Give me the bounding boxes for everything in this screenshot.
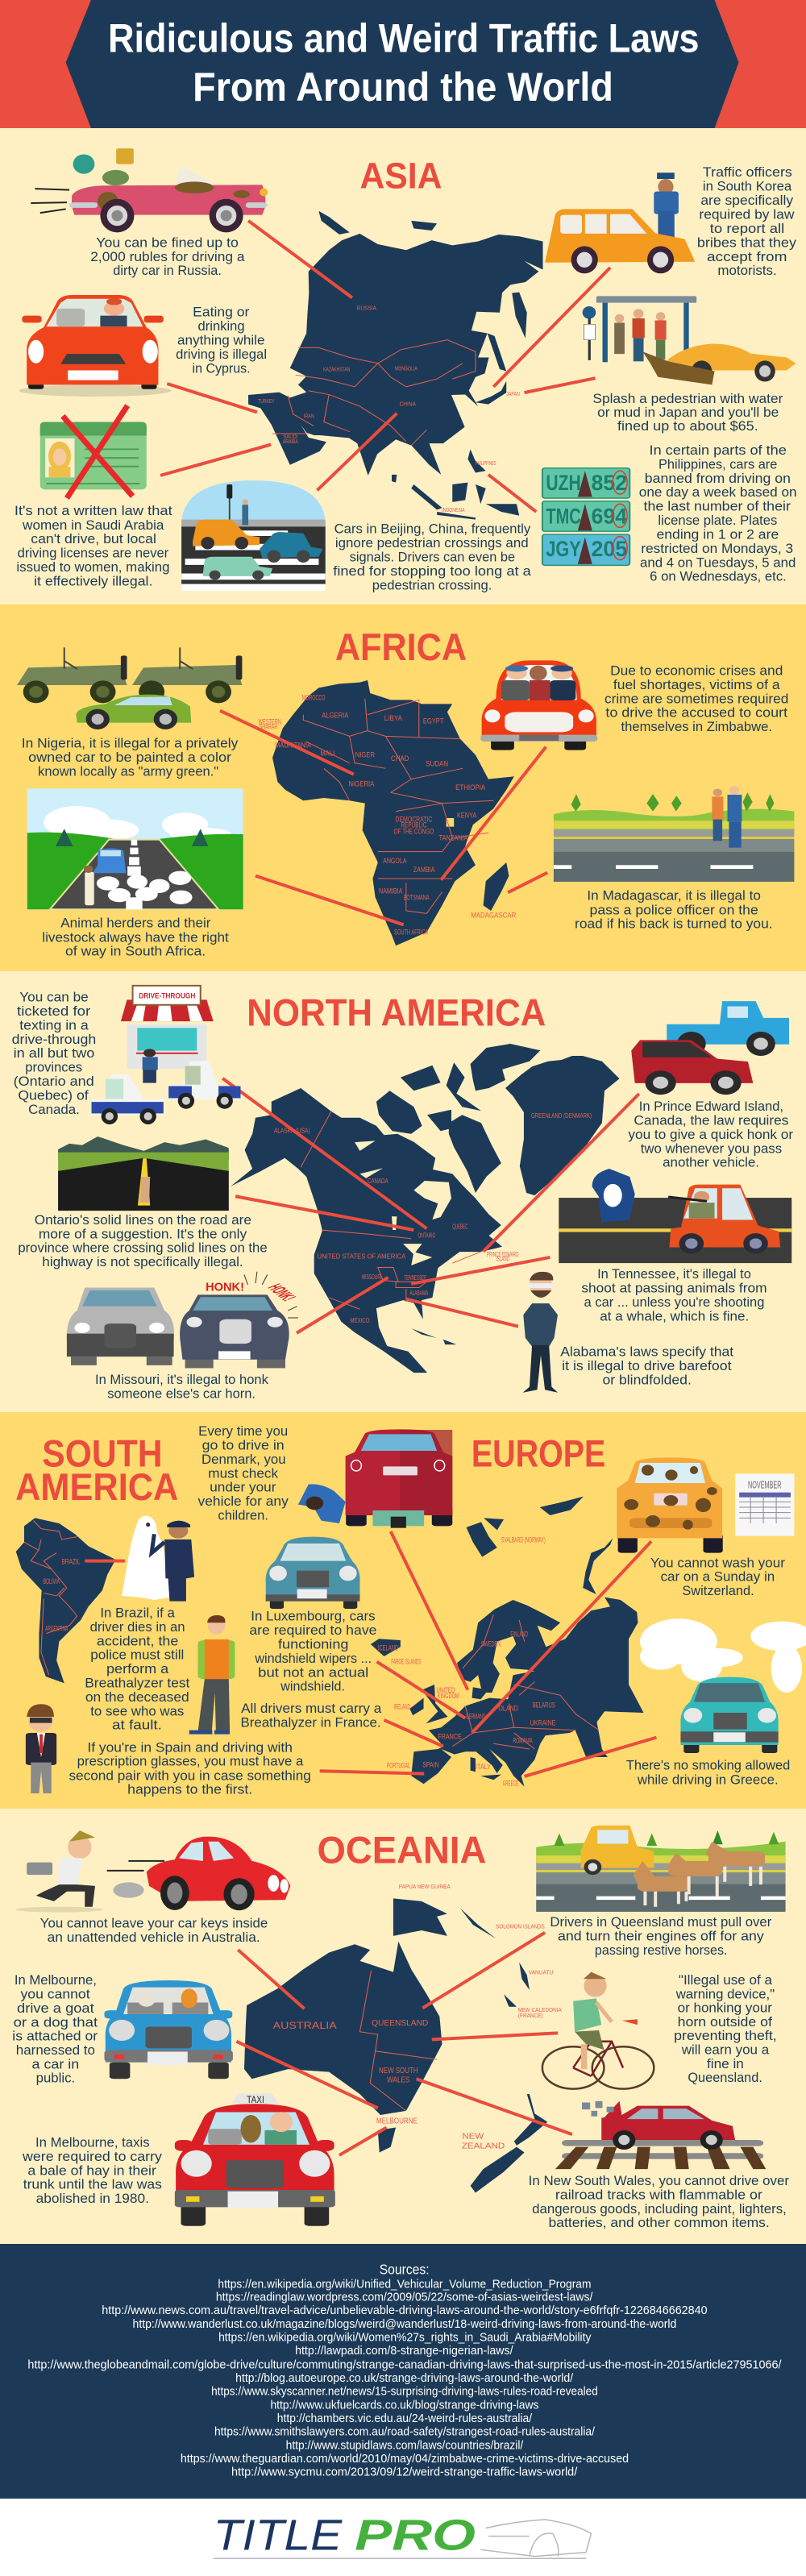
map: Europe: UKRAINE (530, 1719, 555, 1727)
map labels: MONGOLIA (395, 365, 418, 372)
text: Brazil: police must still (90, 1647, 184, 1663)
map: Europe (371, 1497, 644, 1788)
map labels: NIGERIA (348, 779, 375, 788)
map: Oceania (244, 1884, 562, 2192)
map labels: BOLIVIA (44, 1577, 60, 1586)
map labels: NAMIBIA (379, 887, 403, 895)
text: Australia keys: an unattended vehicle in Australia. (48, 1930, 260, 1945)
text: Beijing: Cars in Beijing, China, frequently (334, 522, 531, 537)
logo: Title Pro: PRO (355, 2511, 476, 2559)
text: Cyprus: Eating or (193, 305, 250, 320)
text: Nigeria: known locally as "army green." (38, 764, 218, 779)
text: Denmark (198, 1424, 289, 1523)
map labels: PRINCE EDWARD (487, 1251, 519, 1258)
map labels: ALASKA (USA) (274, 1127, 310, 1135)
text: Madagascar (575, 888, 773, 932)
text: Melbourne goat: or a dog that (14, 2015, 98, 2030)
heading: ASIA: ASIA (359, 156, 442, 197)
text: Canada texting: You can be (19, 990, 89, 1005)
text: Melbourne goat: drive a goat (17, 2001, 94, 2016)
text: Alabama: or blindfolded. (603, 1373, 692, 1388)
text: South Korea: accept from (707, 250, 787, 264)
icon: bus stop and splashing car (583, 296, 796, 384)
text: Canada texting: in all but two (14, 1046, 94, 1061)
map labels: FAROE ISLANDS (391, 1657, 421, 1666)
map labels: (FRANCE) (518, 2013, 543, 2019)
text: Russia: dirty car in Russia. (113, 264, 222, 279)
text: France: All drivers must carry a (241, 1701, 382, 1716)
text: Japan: fined up to about $65. (617, 419, 758, 434)
icon: license plates: TMC (546, 504, 581, 528)
text: Luxembourg: windshield wipers ... (255, 1652, 372, 1666)
map labels: CHAD (391, 754, 409, 763)
text: Ontario: highway is not specifically illegal. (42, 1255, 243, 1269)
icon: honking cars (67, 1272, 300, 1368)
map labels: FINLAND (510, 1630, 528, 1639)
icon: drive-through shop and trucks: DRIVE-THROUGH (139, 991, 195, 1000)
text: Beijing: signals. Drivers can even be (350, 551, 515, 565)
map labels: SOLOMON ISLANDS (496, 1924, 545, 1930)
text: Saudi Arabia: can't drive, but local (31, 533, 156, 546)
text: sources list: http://chambers.vic.edu.au/24-weird-rules-australia/ (277, 2412, 533, 2424)
text: Canada texting (12, 990, 96, 1117)
text: Melbourne taxi (22, 2136, 162, 2206)
icon: whale and hunter in car (559, 1169, 791, 1263)
text: Tennessee (581, 1267, 767, 1324)
heading: NORTH AMERICA: NORTH AMERICA (247, 991, 546, 1034)
text: Greece (626, 1758, 790, 1787)
icon: red taxi (175, 2093, 335, 2226)
panel: Oceania (0, 1809, 806, 2244)
text: Queensland horn (674, 1973, 777, 2085)
map labels: SUDAN (426, 760, 448, 768)
map labels: ANGOLA (383, 857, 407, 866)
text: Brazil (85, 1606, 189, 1733)
text: France: Breathalyzer in France. (240, 1715, 381, 1730)
map labels (44, 1558, 81, 1633)
icon: license plates: UZH (546, 470, 581, 495)
icon: Beijing crossing scene (181, 480, 326, 591)
map: South America: ARGENTINA (45, 1624, 68, 1633)
icon: honking cars: HONK! (206, 1281, 244, 1294)
text: Melbourne goat: you cannot (21, 1987, 90, 2001)
text: Philippines (639, 443, 797, 584)
text: Denmark: vehicle for any (198, 1494, 289, 1509)
map labels: NEW SOUTH (379, 2066, 418, 2075)
logo: Title Pro (214, 2511, 591, 2559)
text: Cyprus: driving is illegal (176, 347, 267, 362)
heading: SOUTH AMERICA: SOUTH (42, 1432, 163, 1475)
text: Brazil: at fault. (112, 1718, 162, 1733)
text: Zimbabwe (604, 663, 788, 734)
icon: red car rear with children and man (298, 1429, 452, 1528)
text: Ontario: more of a suggestion. It's the only (39, 1227, 247, 1242)
text: Australia keys: You cannot leave your car keys inside (40, 1916, 268, 1931)
map labels: UNITED (436, 1686, 455, 1695)
text: Russia: 2,000 rubles for driving a (90, 250, 245, 264)
text: Brazil: In Brazil, if a (100, 1606, 175, 1621)
map labels: KAZAKHSTAN (323, 366, 350, 372)
text: Spain: If you're in Spain and driving with (87, 1740, 293, 1755)
text: Brazil: accident, the (97, 1634, 178, 1648)
map labels (378, 1535, 555, 1788)
map labels: SPAIN (422, 1760, 439, 1769)
map labels: REPUBLIC (401, 821, 426, 829)
map labels: PORTUGAL (387, 1761, 410, 1770)
text: Brazil: driver dies in an (90, 1620, 185, 1635)
text: Melbourne taxi: In Melbourne, taxis (35, 2136, 150, 2150)
icon: army green jeeps and car (17, 647, 242, 729)
text: Brazil: perform a (106, 1662, 169, 1676)
map labels: CANADA (368, 1177, 388, 1185)
icon: running man and red car (15, 1830, 290, 1913)
map labels: WALES (387, 2075, 409, 2084)
map labels: PHILIPPINES (476, 459, 496, 467)
map: South America (16, 1518, 116, 1683)
map labels: DEMOCRATIC (395, 815, 432, 824)
map labels: AUSTRALIA (273, 2020, 337, 2031)
text: Denmark: must check (208, 1466, 278, 1481)
map labels: WESTERN (259, 717, 281, 726)
map labels: ALABAMA (409, 1289, 429, 1297)
text: South Africa: Animal herders and their (60, 916, 211, 931)
text: Canada texting: texting in a (19, 1018, 89, 1033)
text: sources list (27, 2262, 782, 2478)
text: Brazil: Breathalyzer test (85, 1676, 189, 1691)
text: South Korea (697, 165, 796, 279)
map labels: GERMANY (466, 1712, 485, 1721)
text: Melbourne goat: a car in (32, 2057, 79, 2072)
text: Spain (69, 1740, 311, 1797)
text: Melbourne goat: In Melbourne, (15, 1973, 97, 1988)
map labels: TANZANIA (439, 834, 468, 842)
map: South America: BRAZIL (62, 1558, 81, 1566)
logo: Title Pro: TITLE (214, 2511, 343, 2559)
icon: drive-through shop and trucks (92, 986, 240, 1124)
text: Saudi Arabia: It's not a written law that (15, 504, 172, 518)
panel: South America and Europe (0, 1412, 806, 1809)
icon: red car front view (19, 295, 171, 397)
text: Alabama (560, 1344, 733, 1388)
text: Missouri (95, 1373, 269, 1402)
text: Ontario (18, 1212, 268, 1269)
heading: SOUTH AMERICA (15, 1432, 178, 1508)
map labels: PAPUA NEW GUINEA (399, 1884, 451, 1890)
text: Cyprus: drinking (198, 319, 245, 334)
leader lines (160, 221, 610, 512)
text: Luxembourg: but not an actual (258, 1665, 368, 1680)
icon: man in suit with glasses (26, 1704, 56, 1793)
text: Russia (90, 236, 245, 279)
text: Spain: prescription glasses, you must have a (77, 1754, 304, 1769)
icon: license plates: 852 (591, 470, 627, 495)
icon: solid line road (58, 1136, 229, 1211)
icon: blue truck and red SUV (631, 1001, 789, 1095)
map labels: INDONESIA (442, 506, 465, 513)
map labels: ROMANIA (513, 1737, 533, 1745)
map labels: ZAMBIA (413, 866, 435, 875)
map labels: MAURITANIA (275, 741, 311, 750)
map labels: POLAND (495, 1705, 518, 1713)
text: Russia: You can be fined up to (96, 236, 239, 251)
map labels: MISSOURI (362, 1273, 381, 1281)
map labels: SWEDEN (481, 1640, 501, 1648)
map labels: JAPAN (506, 390, 520, 397)
map labels: ZEALAND (462, 2142, 505, 2150)
icon: license plates: JGY (546, 536, 581, 561)
text: sources list: Sources: (380, 2262, 430, 2278)
text: Australia keys (40, 1916, 268, 1945)
text: Luxembourg: functioning (278, 1637, 348, 1652)
map labels: MEXICO (350, 1316, 370, 1324)
text: Prince Edward Island (628, 1099, 793, 1170)
panel: North America (0, 971, 806, 1412)
map labels: MALI (320, 749, 334, 758)
panel: Africa: AFRICA (335, 626, 467, 668)
text: Japan (592, 393, 783, 434)
text: sources list: http://www.stupidlaws.com/laws/countries/brazil/ (286, 2438, 524, 2452)
text: Spain: second pair with you in case something (69, 1768, 311, 1783)
map labels: TENNESSEE (404, 1273, 426, 1282)
map labels: ALGERIA (322, 712, 349, 720)
text: Cyprus: anything while (177, 334, 264, 348)
map labels: NEW (462, 2132, 484, 2141)
text: South Korea: motorists. (717, 264, 777, 279)
icon: blue car with goat and dog (104, 1980, 233, 2079)
panel: Africa: MADAGASCAR (471, 911, 516, 920)
map labels: LIBYA (384, 714, 402, 723)
text: Luxembourg: windshield. (280, 1679, 345, 1694)
text: South Africa: livestock always have the right (42, 930, 229, 945)
map labels (258, 305, 520, 513)
text: Missouri: someone else's car horn. (107, 1386, 256, 1402)
map labels: ISLAND (496, 1255, 509, 1263)
map labels (274, 1111, 592, 1324)
map labels: SOUTH AFRICA (394, 928, 428, 937)
panel: title banner (0, 0, 806, 128)
text: South Africa: of way in South Africa. (65, 944, 206, 959)
panel: sources (0, 2244, 806, 2559)
map labels: ONTARIO (418, 1232, 435, 1239)
text: Denmark: Every time you (198, 1424, 288, 1439)
text: Saudi Arabia (15, 504, 172, 589)
text: New South Wales (529, 2174, 789, 2230)
map labels: VANUATU (529, 1969, 553, 1976)
text: Queensland horses (550, 1915, 771, 1958)
map labels: OF THE CONGO (394, 827, 434, 836)
map labels: QUEBEC (452, 1223, 467, 1231)
map labels: GREECE (503, 1779, 518, 1788)
panel: Africa (0, 605, 806, 971)
map labels: BOTSWANA (404, 894, 430, 902)
text: Cyprus (176, 305, 267, 376)
text: Missouri: In Missouri, it's illegal to honk (95, 1373, 269, 1387)
icon: red taxi: TAXI (247, 2094, 264, 2105)
text: Melbourne taxi: trunk until the law was (23, 2178, 162, 2192)
text: Melbourne goat (12, 1973, 98, 2086)
map labels (273, 1884, 562, 2150)
text: Luxembourg: In Luxembourg, cars (251, 1609, 376, 1624)
icon: muddy orange car rear (617, 1457, 723, 1553)
text: Denmark: under your (210, 1480, 276, 1495)
text: Brazil: on the deceased (85, 1690, 189, 1705)
panel: Oceania: NEW CALEDONIA (518, 2007, 562, 2013)
heading: OCEANIA: OCEANIA (318, 1828, 486, 1871)
text: Canada texting: Canada. (28, 1102, 80, 1117)
text: Canada texting: ticketed for (17, 1003, 90, 1019)
icon: teal car Luxembourg (266, 1537, 360, 1609)
text: Cyprus: in Cyprus. (193, 362, 251, 376)
map labels: ICELAND (378, 1644, 398, 1652)
icon: crossed out driving license (40, 405, 147, 498)
map labels: IRAN (304, 413, 314, 419)
map: North America: GREENLAND (DENMARK) (531, 1111, 592, 1120)
title (108, 16, 699, 110)
text: Melbourne goat: harnessed to (16, 2043, 95, 2058)
leader lines (85, 1531, 656, 1776)
map labels: SHARAH (259, 723, 277, 731)
text: Luxembourg (249, 1609, 377, 1694)
text: Beijing: ignore pedestrian crossings and (335, 536, 529, 551)
text: Spain: happens to the first. (127, 1782, 252, 1797)
text: Switzerland (650, 1556, 785, 1598)
text: Melbourne taxi: a bale of hay in their (27, 2163, 156, 2178)
text: Denmark: Denmark, you (202, 1452, 286, 1467)
icon: officer and orange car (545, 172, 695, 273)
text: Melbourne goat: public. (36, 2071, 75, 2086)
map: Asia (248, 211, 543, 520)
map: Europe: SVALBARD (NORWAY) (501, 1535, 546, 1544)
text: Beijing: fined for stopping too long at a (333, 564, 531, 579)
text: Canada texting: (Ontario and (14, 1074, 94, 1089)
map labels: TURKEY (258, 397, 275, 405)
map labels: IRELAND (394, 1703, 410, 1711)
map labels: RUSSIA (357, 305, 377, 311)
text: sources list: http://www.ukfuelcards.co.uk/blog/strange-driving-laws (270, 2398, 538, 2412)
leader lines (236, 1933, 572, 2155)
icon: November calendar (735, 1473, 794, 1536)
text: Saudi Arabia: issued to women, making (16, 560, 169, 575)
text: South Korea: to report all (710, 222, 784, 236)
text: Canada texting: provinces (25, 1060, 82, 1075)
map labels: ITALY (476, 1763, 491, 1772)
text: Queensland horn: fine in (707, 2057, 744, 2071)
text: Denmark: children. (218, 1508, 268, 1523)
icon: Zimbabwe red car (480, 660, 597, 750)
panel: Asia (0, 128, 806, 605)
text: sources list: http://lawpadi.com/8-strange-nigerian-laws/ (295, 2344, 513, 2357)
map labels: MELBOURNE (376, 2117, 418, 2125)
map labels: ETHIOPIA (455, 783, 485, 792)
map: Africa (259, 680, 516, 945)
map labels: EGYPT (423, 717, 444, 725)
icon: man in orange vest (189, 1615, 235, 1735)
icon: horses road scene (536, 1826, 786, 1912)
map labels: QUEENSLAND (372, 2018, 428, 2028)
leader lines (222, 1078, 639, 1333)
icon: cyclist (542, 1972, 654, 2089)
text: Melbourne taxi: abolished in 1980. (36, 2192, 149, 2206)
text: Canada texting: Quebec) of (18, 1088, 89, 1103)
map labels (259, 694, 516, 937)
panel: South America and Europe: EUROPE (472, 1432, 605, 1475)
text: Nigeria (22, 736, 238, 779)
icon: herders on the road scene (27, 788, 243, 909)
icon: blindfolded man (523, 1272, 558, 1393)
map labels: CHINA (400, 401, 417, 407)
icon: smoking teal car (640, 1618, 806, 1753)
icon: license plates (542, 468, 629, 565)
map labels: ARABIA (283, 438, 298, 445)
panel: South America and Europe: AMERICA (15, 1466, 178, 1508)
text: Nigeria: owned car to be painted a color (28, 750, 231, 765)
map: North America (231, 1044, 620, 1373)
text: Brazil: to see who was (90, 1704, 184, 1718)
icon: license plates: 205 (591, 536, 627, 561)
text: Saudi Arabia: driving licenses are never (18, 546, 169, 561)
text: Beijing (333, 522, 531, 593)
text: Saudi Arabia: it effectively illegal. (34, 575, 152, 589)
text: Ontario: province where crossing solid lines on the (18, 1240, 268, 1256)
text: Nigeria: In Nigeria, it is illegal for a privately (22, 736, 238, 751)
icon: honking cars: HONK! (264, 1282, 300, 1303)
text: South Africa (42, 916, 229, 959)
text: Melbourne goat: is attached or (12, 2030, 98, 2044)
text: Ontario: Ontario's solid lines on the road are (35, 1212, 251, 1228)
icon: red car on railroad tracks (555, 2101, 766, 2169)
map labels: MOROCCO (302, 694, 325, 702)
icon: Madagascar road scene (554, 786, 794, 882)
text: Philippines: ending in 1 or 2 are (656, 528, 779, 542)
map labels: FRANCE (438, 1732, 462, 1741)
text: Denmark: go to drive in (202, 1438, 285, 1453)
map labels: KENYA (457, 811, 476, 820)
map labels: SAUDI (283, 433, 297, 440)
leader lines (220, 711, 547, 924)
text: Canada texting: drive-through (12, 1032, 96, 1047)
map labels: KINGDOM (438, 1692, 459, 1701)
icon: license plates: 694 (591, 504, 627, 528)
icon: dirty pink convertible (31, 148, 268, 232)
map: Europe: BELARUS (533, 1701, 555, 1710)
text: Saudi Arabia: women in Saudi Arabia (22, 518, 164, 533)
text: Luxembourg: are required to have (249, 1623, 377, 1638)
icon: ghost and police officer (122, 1516, 194, 1602)
map labels: NIGER (355, 750, 375, 759)
text: Melbourne taxi: were required to carry (22, 2150, 162, 2164)
map labels: UNITED STATES OF AMERICA (318, 1253, 406, 1261)
text: France (240, 1701, 382, 1730)
text: Beijing: pedestrian crossing. (372, 579, 492, 593)
title: From Around the World (193, 65, 613, 110)
